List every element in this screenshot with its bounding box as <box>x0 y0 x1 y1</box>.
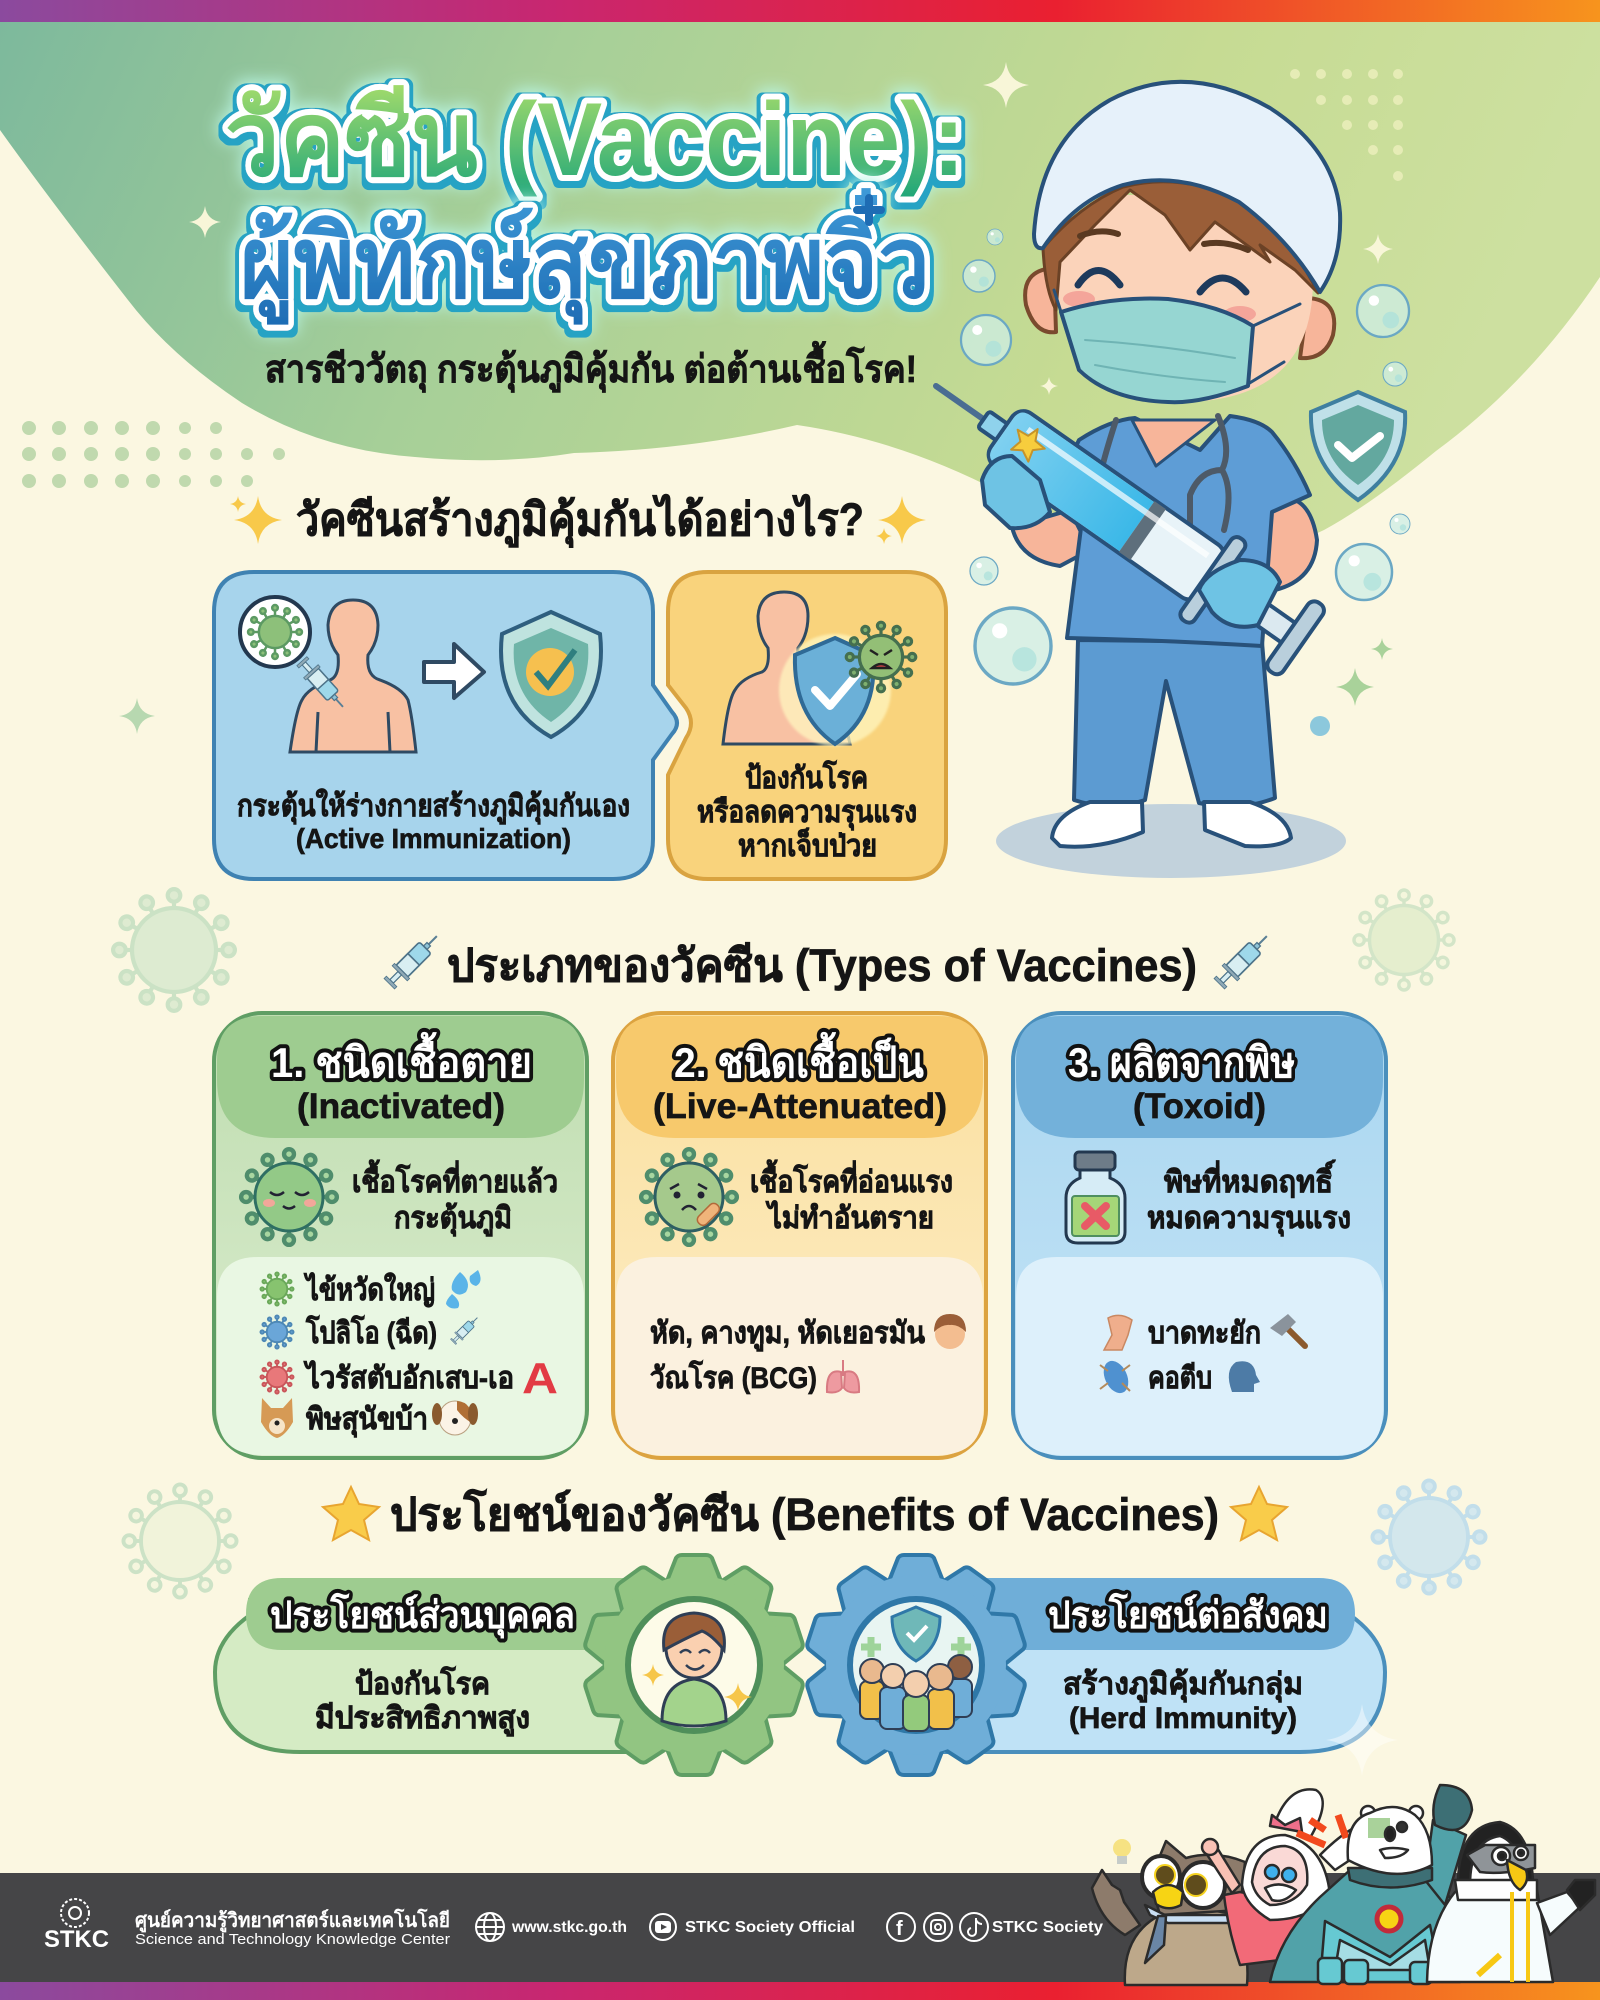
icon: vial <box>1066 1152 1125 1243</box>
footer: website: www.stkc.go.th <box>511 1919 627 1936</box>
gear with group <box>803 1555 1029 1775</box>
icon: diphtheria germ <box>1099 1357 1133 1397</box>
band title: ประโยชน์ส่วนบุคคล <box>270 1592 575 1639</box>
icon: instagram <box>924 1913 952 1941</box>
plunger end <box>1264 598 1327 677</box>
star <box>1006 420 1052 465</box>
icon: body with shield and virus <box>723 592 916 746</box>
footer: social name: STKC Society <box>992 1919 1103 1936</box>
caption: ป้องกันโรค <box>745 759 868 795</box>
heading: how vaccines work <box>230 493 926 548</box>
shirt <box>1050 416 1310 646</box>
icon: hepatitis virus <box>260 1360 294 1394</box>
icon: injured foot <box>1104 1315 1132 1350</box>
icon: tiktok <box>960 1913 988 1941</box>
pants <box>1074 640 1275 807</box>
caption english: (Active Immunization) <box>296 823 571 854</box>
syringe <box>907 345 1332 684</box>
caption: กระตุ้นให้ร่างกายสร้างภูมิคุ้มกันเอง <box>237 788 630 825</box>
face <box>1052 195 1313 402</box>
examples box <box>616 1257 983 1455</box>
caption line 2: หรือลดความรุนแรง <box>697 796 917 831</box>
hair <box>1043 182 1318 310</box>
band title: ประโยชน์ต่อสังคม <box>1048 1592 1328 1637</box>
arms <box>1012 498 1317 590</box>
header band <box>616 1016 983 1138</box>
example: BCG: วัณโรค (BCG) <box>650 1359 817 1395</box>
icon: youtube <box>650 1914 676 1940</box>
decorative virus lower right <box>1372 1480 1486 1594</box>
caption line 3: หากเจ็บป่วย <box>738 827 877 863</box>
dot pattern top right <box>1290 69 1403 181</box>
icon: dog left <box>261 1398 293 1438</box>
icon: arrow <box>424 644 484 698</box>
band <box>246 1578 660 1650</box>
owl <box>1092 1841 1248 1985</box>
heading text: ประเภทของวัคซีน (Types of Vaccines) <box>447 940 1197 991</box>
people <box>860 1655 972 1731</box>
title line 1: วัคซีน (Vaccine): <box>225 82 965 198</box>
icon: facebook: f <box>896 1918 903 1940</box>
barrel <box>983 406 1230 605</box>
blush <box>1063 291 1095 307</box>
bubbles <box>961 229 1410 736</box>
description line 2: กระตุ้นภูมิ <box>394 1202 512 1237</box>
liquid <box>986 408 1154 551</box>
icon: magnified virus <box>240 597 310 667</box>
hub <box>978 411 1009 441</box>
person <box>662 1613 726 1726</box>
rabbit <box>1202 1789 1380 1965</box>
card title: 2. ชนิดเชื้อเป็น <box>674 1031 924 1086</box>
footer: youtube name: STKC Society Official <box>685 1919 855 1936</box>
icon: speaking head <box>1229 1361 1260 1392</box>
panel: personal benefit <box>215 1555 807 1775</box>
card subtitle: (Toxoid) <box>1133 1087 1266 1126</box>
panel: toxoid <box>1013 1013 1386 1458</box>
shoes <box>1052 802 1291 847</box>
dot pattern left <box>22 421 285 488</box>
example: diphtheria: คอตีบ <box>1148 1362 1212 1395</box>
icon: facebook <box>887 1913 915 1941</box>
top gradient bar <box>0 0 1600 22</box>
icon: sparkle right <box>876 496 926 544</box>
decorative virus top right <box>1354 890 1454 990</box>
icon: sleeping virus <box>241 1149 337 1245</box>
example: tetanus: บาดทะยัก <box>1148 1317 1261 1350</box>
mask pleats <box>1085 340 1235 382</box>
bear <box>1270 1785 1472 1984</box>
footer: organisation English name: Science and Technology Knowledge Center <box>135 1931 450 1948</box>
icon: sparkle left <box>230 496 282 544</box>
floor shadow <box>996 804 1346 878</box>
footer band <box>0 1873 1600 1982</box>
plunger rod <box>1208 571 1297 644</box>
icon: hammer <box>1270 1314 1305 1346</box>
icon: globe <box>476 1913 504 1941</box>
description line 2: หมดความรุนแรง <box>1147 1202 1351 1237</box>
card subtitle: (Inactivated) <box>297 1087 505 1126</box>
benefit line 2: มีประสิทธิภาพสูง <box>315 1702 530 1737</box>
icon: water drops <box>446 1270 481 1308</box>
heading: types of vaccines <box>382 929 1274 991</box>
icon: syringe right <box>1212 929 1274 991</box>
icon: small syringe <box>449 1314 481 1346</box>
icon: flu virus <box>260 1272 294 1306</box>
right glove <box>1199 560 1280 627</box>
icon: syringe left <box>382 929 444 991</box>
mask straps <box>1054 290 1300 384</box>
card title: 1. ชนิดเชื้อตาย <box>271 1031 532 1086</box>
penguin <box>1427 1822 1595 1982</box>
heading text: วัคซีนสร้างภูมิคุ้มกันได้อย่างไร? <box>296 493 864 548</box>
example: polio: โปลิโอ (ฉีด) <box>305 1314 437 1350</box>
footer: logo: STKC <box>44 1926 109 1953</box>
subtitle: สารชีววัตถุ กระตุ้นภูมิคุ้มกัน ต่อต้านเชื้อโรค! <box>265 341 917 393</box>
icon: lungs <box>827 1360 859 1392</box>
description: เชื้อโรคที่อ่อนแรง <box>750 1159 953 1199</box>
icon: polio virus <box>260 1315 294 1349</box>
examples box <box>217 1257 584 1455</box>
panel: live-attenuated <box>613 1013 986 1458</box>
sparkle <box>1326 1704 1398 1776</box>
ring <box>1119 501 1166 560</box>
footer bottom gradient bar <box>0 1982 1600 2000</box>
ears <box>1025 268 1334 358</box>
example: measles: หัด, คางทูม, หัดเยอรมัน <box>650 1317 925 1352</box>
highlight <box>1026 427 1210 558</box>
panel: outcome (yellow) <box>668 572 946 879</box>
card subtitle: (Live-Attenuated) <box>653 1087 947 1126</box>
footer: organisation Thai name: ศูนย์ความรู้วิทยาศาสตร์และเทคโนโลยี <box>135 1908 450 1934</box>
panel: inactivated <box>214 1013 587 1458</box>
benefit line 1: สร้างภูมิคุ้มกันกลุ่ม <box>1063 1668 1303 1703</box>
examples box <box>1016 1257 1383 1455</box>
description line 2: ไม่ทำอันตราย <box>765 1200 934 1235</box>
illustration: nurse with syringe <box>907 82 1346 878</box>
description: เชื้อโรคที่ตายแล้ว <box>352 1159 558 1199</box>
example: rabies: พิษสุนัขบ้า <box>306 1403 428 1438</box>
green wave background <box>0 22 1600 553</box>
neck v <box>1132 420 1215 466</box>
decorative sparkles <box>119 62 1393 734</box>
benefit line 2: (Herd Immunity) <box>1069 1702 1297 1735</box>
eyebrows <box>1080 231 1248 250</box>
icon: shield with check <box>501 612 601 737</box>
title line 2: ผู้พิทักษ์สุขภาพจิ๋ว <box>240 188 930 325</box>
icon: dog face <box>432 1401 478 1435</box>
band <box>940 1578 1355 1650</box>
cap <box>1034 82 1340 292</box>
example: hepatitis A: ไวรัสตับอักเสบ-เอ <box>303 1360 514 1395</box>
decorative virus lower left <box>123 1484 237 1598</box>
panel: social benefit <box>803 1555 1398 1776</box>
header band <box>217 1016 584 1138</box>
mask <box>1061 299 1253 402</box>
plus mark <box>857 198 881 222</box>
stethoscope <box>1100 416 1229 530</box>
icon: star right <box>1231 1487 1287 1540</box>
icon: boy face <box>934 1314 966 1349</box>
benefit line 1: ป้องกันโรค <box>355 1665 490 1701</box>
footer: logo <box>44 1899 109 1953</box>
card title: 3. ผลิตจากพิษ <box>1068 1039 1295 1086</box>
decorative virus top left <box>113 889 235 1011</box>
eyes <box>1078 270 1246 292</box>
icon: syringe into shoulder <box>295 655 350 713</box>
icon: weak virus <box>641 1149 737 1245</box>
panel: active immunization (blue) <box>214 572 677 879</box>
heading: benefits <box>323 1487 1287 1540</box>
mascots <box>1092 1785 1595 1985</box>
icon: body <box>290 600 416 752</box>
icon: star left <box>323 1487 379 1540</box>
flange <box>1178 534 1248 625</box>
header band <box>1016 1016 1383 1138</box>
icon: shield beside nurse <box>1311 392 1405 500</box>
left glove <box>982 456 1050 528</box>
icon: letter A: A <box>522 1354 558 1403</box>
needle <box>936 386 984 419</box>
gear with person <box>581 1555 807 1775</box>
heading text: ประโยชน์ของวัคซีน (Benefits of Vaccines) <box>390 1488 1219 1540</box>
example: flu: ไข้หวัดใหญ่ <box>303 1272 435 1308</box>
lightbulb <box>1113 1839 1131 1864</box>
description: พิษที่หมดฤทธิ์ <box>1164 1159 1337 1199</box>
shield <box>892 1607 940 1661</box>
